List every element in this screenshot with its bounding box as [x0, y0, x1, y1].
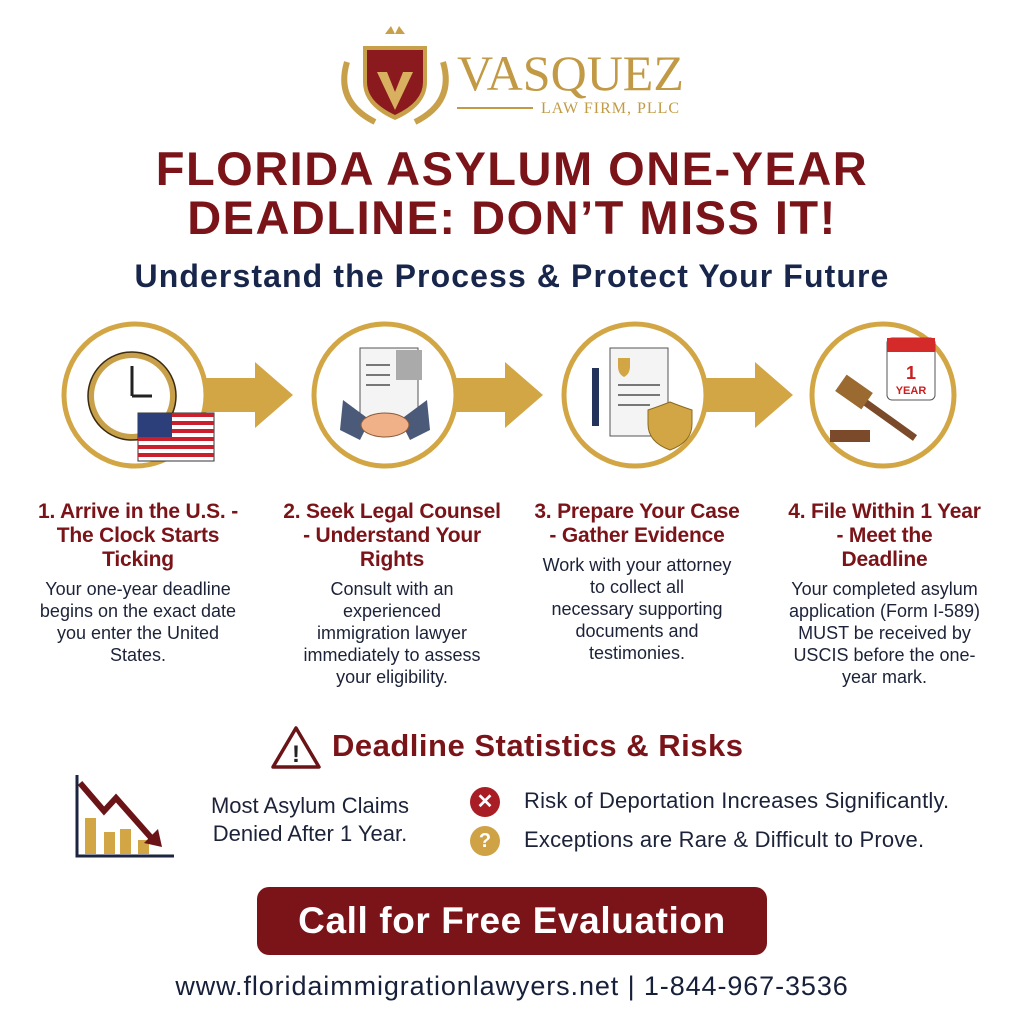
logo [341, 26, 684, 125]
step 1: 1. Arrive in the U.S. - [38, 500, 238, 523]
stats heading: Deadline Statistics & Risks [332, 728, 744, 763]
step 3: 3. Prepare Your Case [534, 500, 740, 523]
risk 1: Risk of Deportation Increases Significantly. [524, 788, 949, 813]
icon: gavel and calendar: 1 [906, 363, 916, 383]
step 4: USCIS before the one- [793, 645, 976, 665]
step 1: you enter the United [57, 623, 219, 643]
CTA button [257, 887, 767, 955]
arrow 3 [705, 362, 793, 428]
icon: laurel shield [344, 26, 446, 122]
step 4 [788, 500, 981, 687]
step 1: Ticking [102, 548, 174, 571]
risk 2: Exceptions are Rare & Difficult to Prove. [524, 827, 924, 852]
step 4: - Meet the [836, 524, 932, 547]
step 2: - Understand Your [303, 524, 481, 547]
icon: handshake and documents [314, 324, 456, 466]
icon: clock and flag [64, 324, 214, 466]
step 1 [38, 500, 238, 665]
step 2: experienced [343, 601, 441, 621]
risk 1: ✕ [477, 791, 493, 813]
contact line: www.floridaimmigrationlawyers.net | 1-844-967-3536 [175, 971, 849, 1001]
CTA button: Call for Free Evaluation [298, 900, 726, 941]
logo: LAW FIRM, PLLC [541, 100, 680, 117]
risk 2: ? [479, 830, 491, 852]
stat text [211, 793, 409, 846]
step 1: States. [110, 645, 166, 665]
step 1: begins on the exact date [40, 601, 236, 621]
step 4: Your completed asylum [791, 579, 978, 599]
step 2: your eligibility. [336, 667, 448, 687]
step 4: application (Form I-589) [789, 601, 980, 621]
step 1: Your one-year deadline [45, 579, 231, 599]
arrow 1 [205, 362, 293, 428]
stat text: Denied After 1 Year. [213, 821, 407, 846]
process icons row [62, 322, 956, 468]
step 3: testimonies. [589, 643, 685, 663]
step 4: MUST be received by [798, 623, 971, 643]
subtitle: Understand the Process & Protect Your Future [135, 258, 889, 294]
step 3: Work with your attorney [543, 555, 731, 575]
step 2: immediately to assess [303, 645, 481, 665]
title [156, 142, 868, 244]
step 3: documents and [575, 621, 699, 641]
step 3 [534, 500, 740, 663]
step 4: Deadline [842, 548, 927, 571]
title: DEADLINE: DON’T MISS IT! [187, 191, 837, 244]
logo: VASQUEZ [457, 45, 684, 101]
step 2: Rights [360, 548, 424, 571]
step 1: The Clock Starts [57, 524, 219, 547]
title: FLORIDA ASYLUM ONE-YEAR [156, 142, 868, 195]
icon: gavel and calendar: YEAR [896, 385, 926, 397]
step 4: year mark. [842, 667, 927, 687]
icon: documents pen shield [564, 324, 706, 466]
stat text: Most Asylum Claims [211, 793, 409, 818]
step 2: 2. Seek Legal Counsel [283, 500, 501, 523]
icon: gavel and calendar [812, 324, 954, 466]
step 3: necessary supporting [551, 599, 723, 619]
step 3: - Gather Evidence [549, 524, 725, 547]
step 4: 4. File Within 1 Year [788, 500, 981, 523]
chart icon [76, 775, 174, 858]
step 2: Consult with an [330, 579, 454, 599]
step 2: immigration lawyer [317, 623, 467, 643]
step 2 [283, 500, 501, 687]
arrow 2 [455, 362, 543, 428]
step 3: to collect all [590, 577, 684, 597]
stats heading: ! [292, 741, 300, 768]
